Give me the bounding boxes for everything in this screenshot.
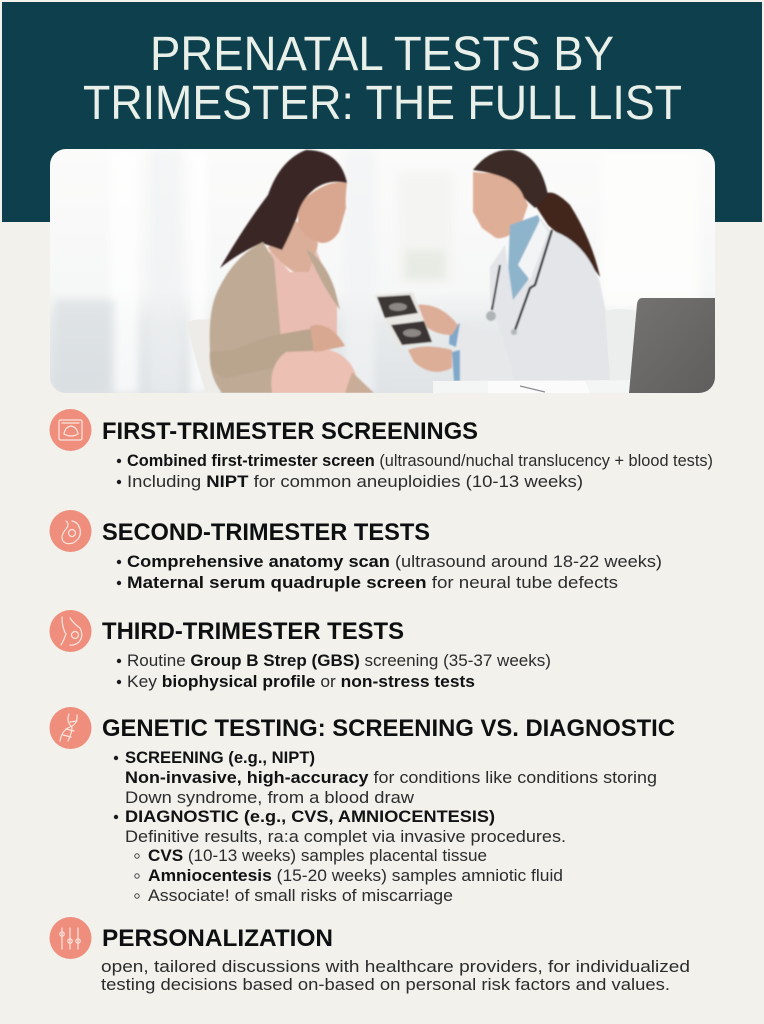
- icon: pregnant body: [50, 610, 92, 652]
- section: third-trimester tests: [50, 610, 551, 691]
- heading: SECOND-TRIMESTER TESTS: [102, 519, 430, 546]
- screening block: Down syndrome, from a blood draw: [125, 789, 414, 807]
- desk and laptop: [433, 380, 630, 393]
- bullet list: [117, 652, 551, 691]
- paragraph: testing decisions based on-based on personal risk factors and values.: [101, 976, 670, 994]
- section: personalization: [50, 917, 690, 994]
- icon: fetus in womb: [50, 510, 92, 552]
- heading: GENETIC TESTING: SCREENING VS. DIAGNOSTIC: [102, 715, 675, 742]
- heading: PERSONALIZATION: [102, 925, 333, 952]
- section: second-trimester tests: [50, 510, 662, 592]
- icon: ultrasound screen: [50, 409, 92, 451]
- title: [83, 28, 682, 130]
- diagnostic block: Amniocentesis (15-20 weeks) samples amniotic fluid: [148, 867, 563, 885]
- screening block: Non-invasive, high-accuracy for conditions like conditions storing: [125, 769, 657, 787]
- diagnostic block: [114, 808, 566, 905]
- heading: FIRST-TRIMESTER SCREENINGS: [102, 418, 478, 445]
- bullet list: Including NIPT for common aneuploidies (10-13 weeks): [127, 473, 583, 491]
- screening block: [114, 749, 657, 807]
- title: TRIMESTER: THE FULL LIST: [83, 77, 682, 130]
- photo: doctor showing ultrasound to pregnant patient: [50, 149, 715, 393]
- title: PRENATAL TESTS BY: [150, 28, 614, 81]
- paragraph: open, tailored discussions with healthcare providers, for individualized: [101, 958, 690, 976]
- bullet list: [117, 452, 713, 491]
- bullet list: [117, 553, 662, 592]
- header band: [2, 2, 762, 222]
- diagnostic block: CVS (10-13 weeks) samples placental tissue: [148, 847, 487, 865]
- diagnostic block: Definitive results, ra:a complet via invasive procedures.: [125, 828, 566, 846]
- icon: sliders: [50, 917, 92, 959]
- bullet list: Combined first-trimester screen (ultrasound/nuchal translucency + blood tests): [127, 452, 713, 470]
- screening block: SCREENING (e.g., NIPT): [125, 749, 315, 767]
- patient chair: [187, 319, 220, 393]
- bullet list: Maternal serum quadruple screen for neural tube defects: [127, 574, 618, 592]
- doctor: [375, 150, 620, 383]
- section: genetic testing: [50, 707, 675, 905]
- bullet list: Routine Group B Strep (GBS) screening (35-37 weeks): [127, 652, 551, 670]
- diagnostic block: DIAGNOSTIC (e.g., CVS, AMNIOCENTESIS): [125, 808, 495, 826]
- heading: THIRD-TRIMESTER TESTS: [102, 618, 404, 645]
- section: first-trimester screenings: [50, 409, 713, 491]
- bullet list: Comprehensive anatomy scan (ultrasound around 18-22 weeks): [127, 553, 662, 571]
- bullet list: Key biophysical profile or non-stress tests: [127, 673, 475, 691]
- paragraph: [101, 958, 690, 994]
- patient: [210, 150, 374, 393]
- diagnostic block: Associate! of small risks of miscarriage: [148, 887, 453, 905]
- icon: DNA helix: [50, 707, 92, 749]
